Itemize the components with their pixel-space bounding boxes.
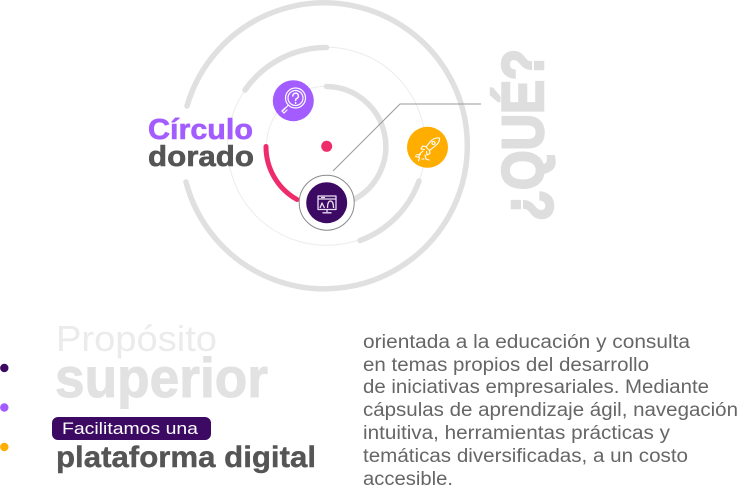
leader line bbox=[333, 104, 481, 171]
icon: rocket bbox=[407, 127, 448, 168]
description paragraph: orientada a la educación y consulta bbox=[363, 332, 690, 353]
description paragraph: accesible. bbox=[363, 469, 453, 490]
icon: question magnifier bbox=[273, 80, 314, 121]
heading: Círculo dorado: Círculo bbox=[148, 114, 253, 146]
description paragraph: temáticas diversificadas, a un costo bbox=[363, 446, 688, 467]
inner ring arc bbox=[326, 86, 386, 200]
heading: Propósito superior: superior bbox=[55, 346, 268, 409]
icon: computer on highlighted node bbox=[299, 175, 354, 230]
heading: plataforma digital: plataforma digital bbox=[56, 441, 316, 474]
center dot bbox=[321, 141, 332, 152]
heading: Círculo dorado bbox=[148, 114, 254, 173]
description paragraph: intuitiva, herramientas prácticas y bbox=[363, 423, 671, 444]
heading: Propósito superior: Propósito bbox=[56, 318, 217, 359]
heading: Círculo dorado: dorado bbox=[148, 141, 254, 173]
outer ring bbox=[186, 3, 467, 289]
description paragraph bbox=[363, 332, 738, 490]
description paragraph: en temas propios del desarrollo bbox=[363, 355, 649, 376]
rotated heading: ¿QUÉ?: ¿QUÉ? bbox=[491, 49, 556, 221]
description paragraph: de iniciativas empresariales. Mediante bbox=[363, 377, 709, 398]
middle ring upper arc bbox=[245, 47, 326, 90]
heading: Propósito superior bbox=[55, 318, 268, 409]
description paragraph: cápsulas de aprendizaje ágil, navegación bbox=[363, 400, 738, 421]
bullet dots bbox=[0, 364, 8, 451]
golden circle diagram bbox=[186, 3, 467, 289]
pink accent arc bbox=[266, 146, 297, 200]
middle ring lower arc bbox=[360, 181, 419, 240]
label pill: Facilitamos una: Facilitamos una bbox=[62, 419, 199, 438]
label pill: Facilitamos una bbox=[52, 417, 211, 440]
